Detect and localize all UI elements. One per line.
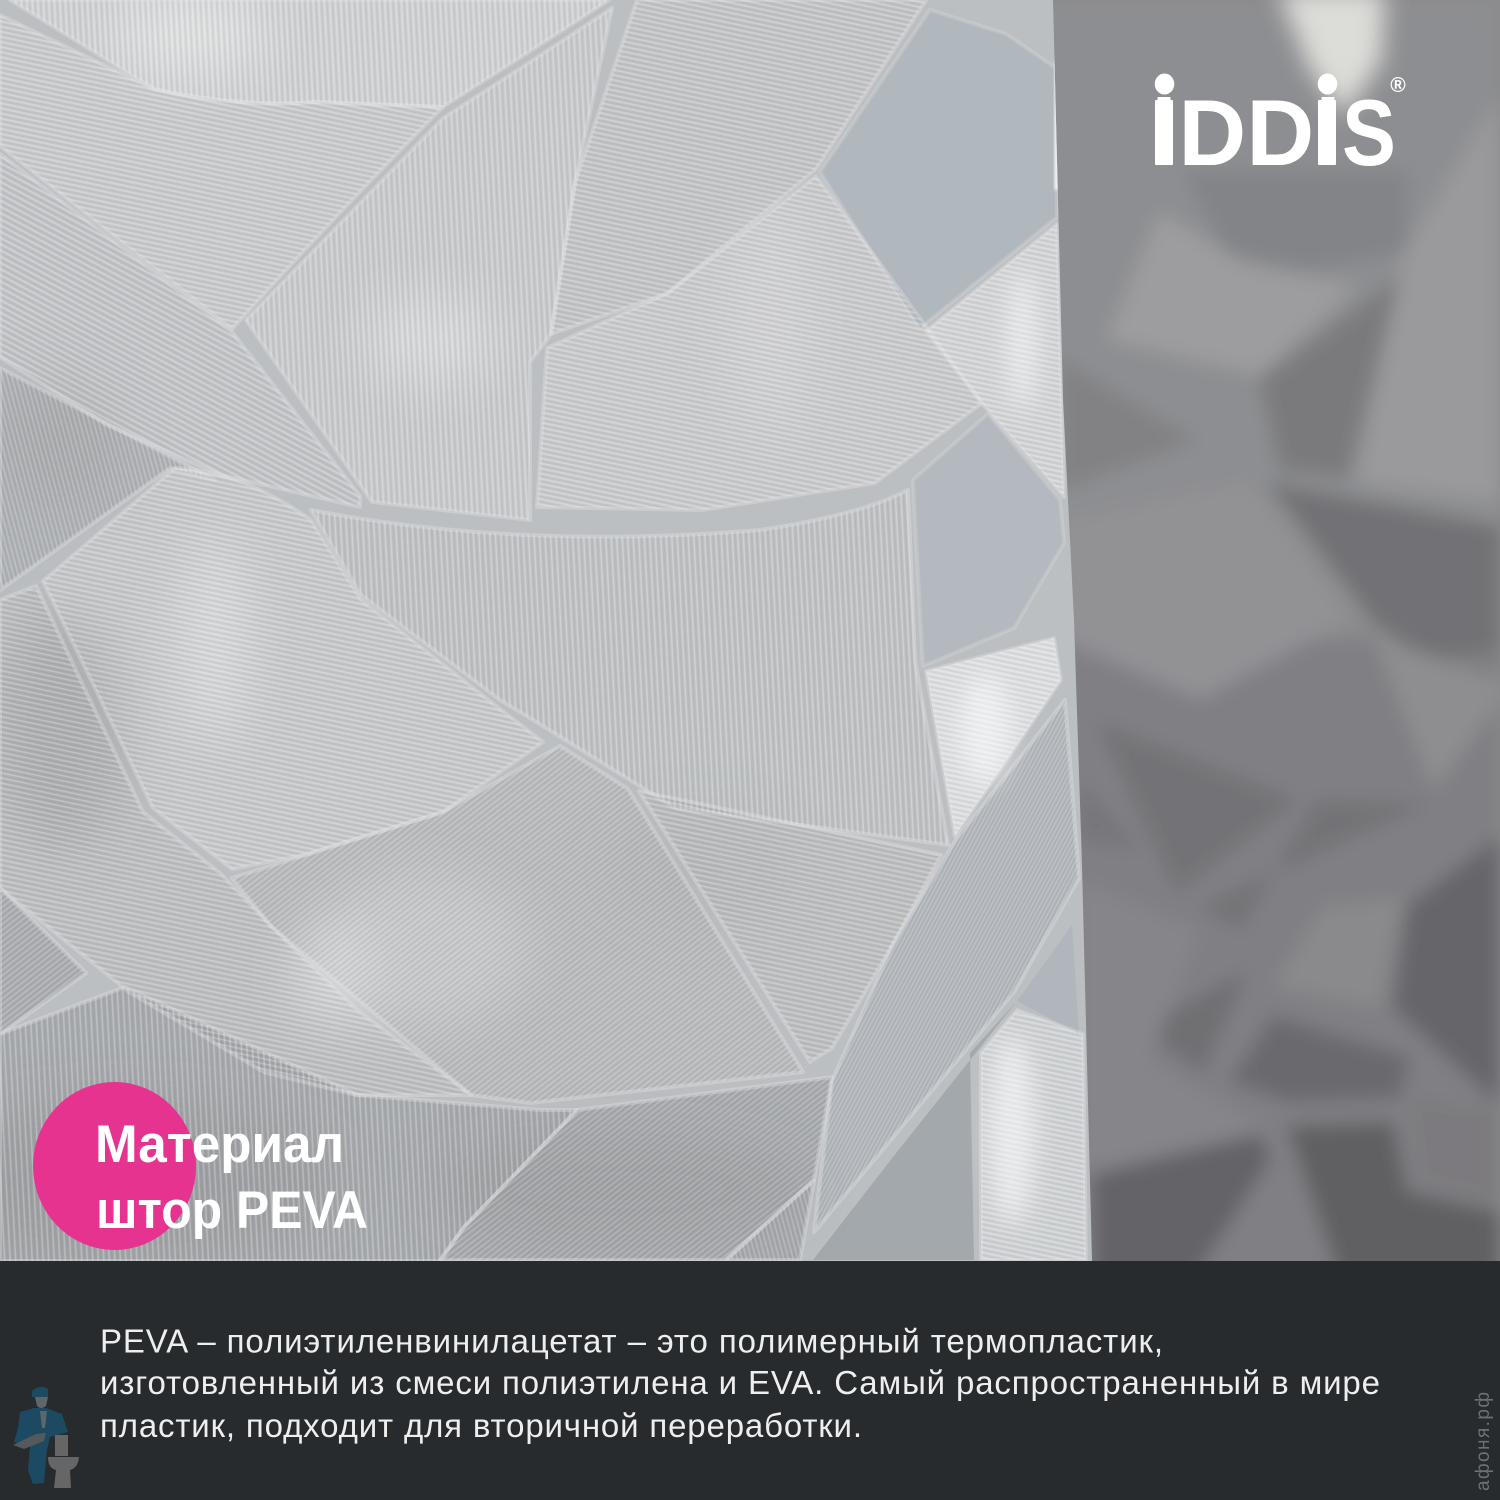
soft light and shadow tones — [0, 0, 815, 1260]
foreground curtain — [0, 0, 1100, 1261]
light glare at the top of background curtain — [1278, 0, 1385, 115]
description text: пластик, подходит для вторичной переработки. — [100, 1407, 862, 1444]
shard tone fills — [0, 0, 1086, 1261]
blurred background curtain — [1040, 0, 1500, 1280]
toilet — [48, 1435, 79, 1488]
ribbed texture with plain edge bands — [0, 0, 1086, 1261]
pink accent circle — [33, 1082, 196, 1250]
logo wordmark: iDDi — [1151, 80, 1341, 185]
wrench — [13, 1433, 46, 1449]
bright curtain fold edge — [1054, 59, 1058, 192]
plumber figure — [14, 1387, 68, 1484]
heading — [95, 1115, 368, 1240]
logo letter stems and dots — [1155, 74, 1337, 165]
description text: изготовленный из смеси полиэтилена и EVA. Самый распространенный в мире — [100, 1364, 1380, 1401]
logo: IDDIS — [1151, 74, 1406, 185]
bottom dark band — [0, 1261, 1500, 1500]
icon: plumber mascot with toilet — [13, 1387, 79, 1488]
description text: PEVA – полиэтиленвинилацетат – это полимерный термопластик, — [100, 1322, 1163, 1360]
heading: Материал — [95, 1115, 344, 1174]
specular highlights — [959, 270, 1036, 1225]
plumber face and shirt — [35, 1397, 48, 1428]
description text — [100, 1322, 1380, 1444]
heading: штор PEVA — [96, 1181, 368, 1240]
watermark: афоня.рф — [1473, 1392, 1494, 1491]
registered mark: ® — [1390, 74, 1406, 97]
logo letter S: S — [1342, 80, 1396, 185]
